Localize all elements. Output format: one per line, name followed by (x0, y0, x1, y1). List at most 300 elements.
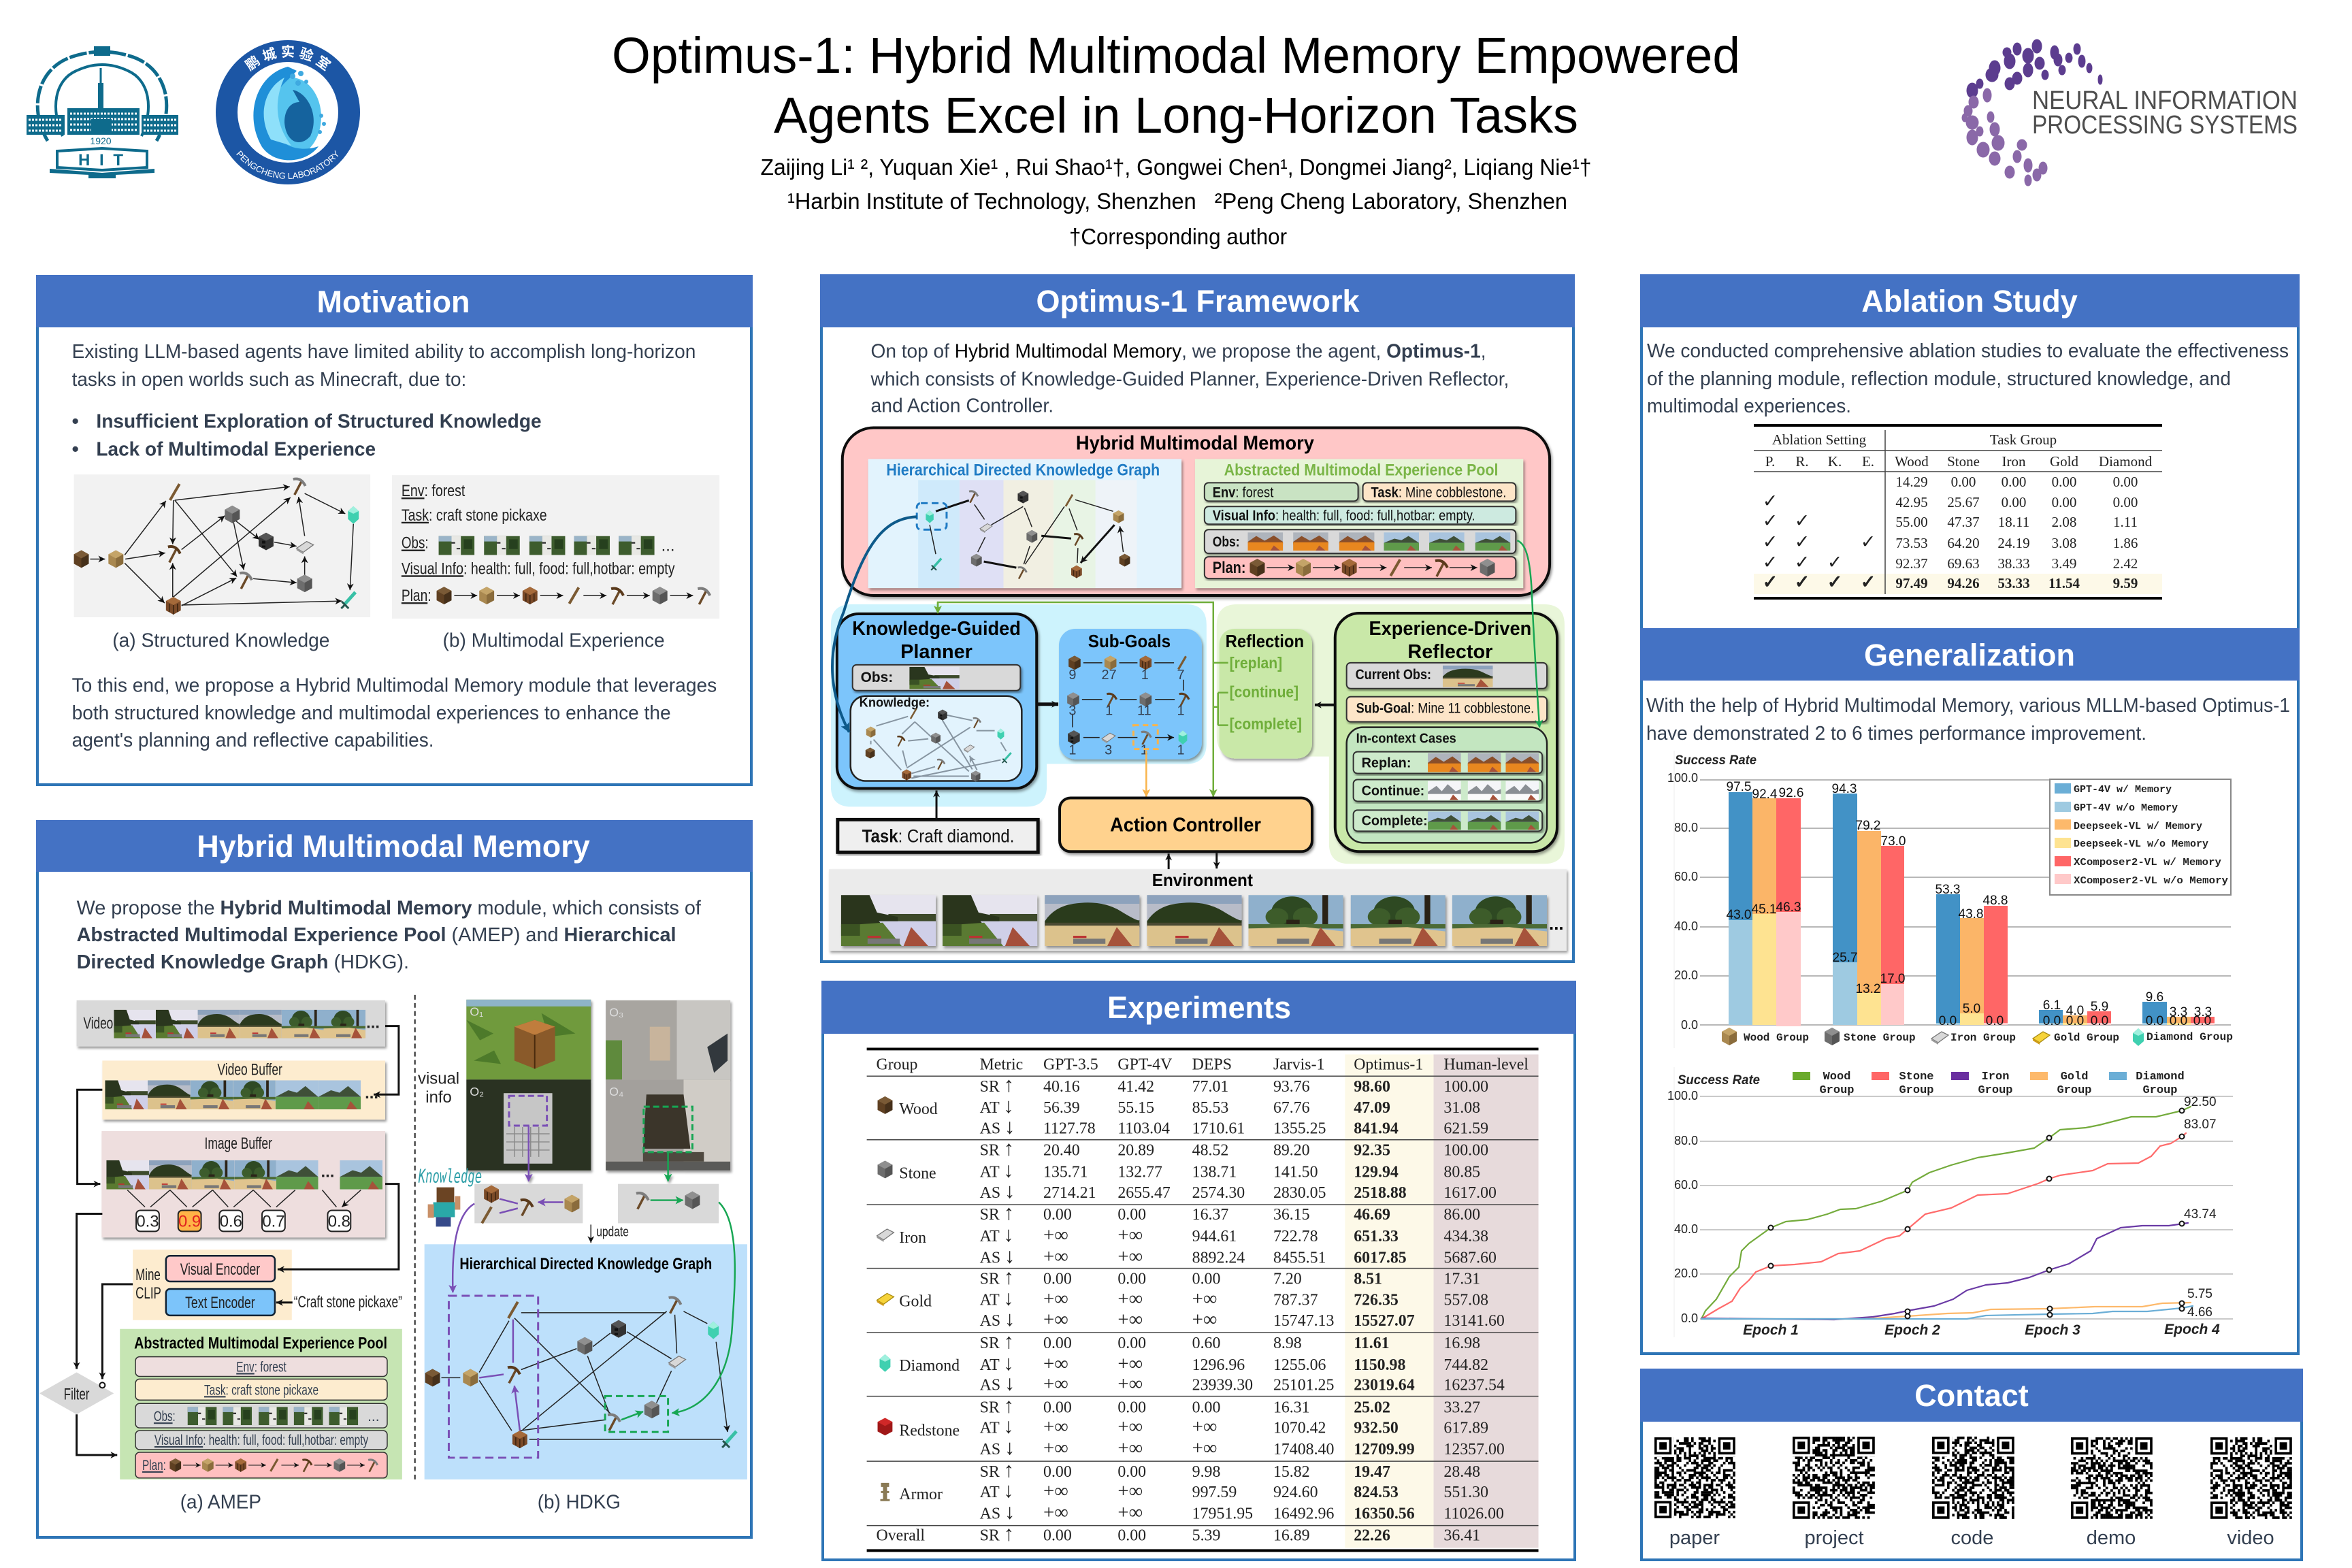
box: Knowledge-Guided Planner: Knowledge-Guided (852, 618, 1021, 640)
results table: 824.53 (1354, 1484, 1399, 1501)
ablation table: ✓ (1763, 491, 1778, 511)
results table: 85.53 (1192, 1099, 1228, 1117)
HMM intro text: Abstracted Multimodal Experience Pool (AMEP) and Hierarchical (77, 924, 676, 946)
figure: multimodal experience (392, 475, 719, 619)
results table: 2655.47 (1117, 1184, 1171, 1202)
line chart: success rate over epochs: 43.74 (2184, 1207, 2217, 1222)
results table: +∞ (1117, 1502, 1143, 1524)
MineCLIP encoders (133, 1250, 402, 1320)
video buffer: Video Buffer (217, 1060, 282, 1079)
arrow: knowledge retrieval curve (832, 517, 917, 732)
box: Action Controller (1060, 798, 1312, 851)
AMEP sub-panel (1195, 459, 1523, 588)
panel: Experiments (821, 981, 1576, 1560)
ablation table: Gold (2050, 453, 2078, 470)
bar chart: success rate by group: 45.1 (1752, 902, 1776, 917)
results table: +∞ (1117, 1288, 1143, 1309)
bar chart legend: GPT-4V w/ Memory (2074, 784, 2172, 796)
bar chart: success rate by group: 100.0 (1667, 771, 1698, 785)
AMEP card: Obs: (154, 1409, 176, 1424)
bar chart legend: GPT-4V w/o Memory (2074, 802, 2178, 814)
results table: 12357.00 (1443, 1441, 1505, 1458)
results table: +∞ (1117, 1480, 1143, 1502)
ablation table: 55.00 (1895, 514, 1928, 530)
motivation bullets: Insufficient Exploration of Structured Knowledge (96, 411, 542, 433)
results table: 1296.96 (1192, 1356, 1245, 1374)
results table: 726.35 (1354, 1291, 1399, 1309)
results table: +∞ (1043, 1502, 1068, 1524)
results table: 0.00 (1043, 1335, 1072, 1352)
results table: AT ↓ (980, 1223, 1014, 1246)
bar chart: success rate by group: 3.3 (2170, 1005, 2187, 1019)
bar chart: success rate by group: 6.1 (2043, 998, 2061, 1013)
figure: multimodal experience: Visual Info: health: full, food: full,hotbar: empty (402, 559, 675, 578)
ablation heading: Ablation Study (1861, 284, 2078, 318)
ablation table: ✓ (1795, 572, 1810, 592)
experiments heading: Experiments (1107, 990, 1291, 1025)
results table: 621.59 (1443, 1120, 1488, 1138)
bar chart: success rate by group: 20.0 (1674, 968, 1698, 982)
QR labels (1669, 1527, 2274, 1549)
ablation table: Diamond (2099, 453, 2153, 470)
box: Sub-Goals: 11 (1137, 704, 1152, 719)
mini graph: table and stick to wooden pickaxe (474, 1184, 583, 1223)
purple update curve (453, 1204, 474, 1292)
results table: 0.00 (1192, 1399, 1220, 1416)
bar chart: success rate by group: 9.6 (2146, 990, 2163, 1004)
results table: AT ↓ (980, 1479, 1014, 1502)
box: Reflection: [replan] (1230, 654, 1282, 672)
bar chart: success rate by group: 97.5 (1727, 780, 1751, 794)
filter diamond: Filter (64, 1385, 90, 1403)
HDKG sub-panel (868, 459, 1181, 588)
results table: Human-level (1443, 1056, 1529, 1073)
line chart: success rate over epochs: Epoch 2 (1884, 1322, 1940, 1338)
results table: 15527.07 (1354, 1312, 1415, 1330)
ablation table: 25.67 (1947, 494, 1980, 510)
figure: multimodal experience: Plan: (402, 587, 431, 605)
results table: 138.71 (1192, 1163, 1237, 1181)
bar chart: success rate by group: 0.0 (2146, 1014, 2163, 1028)
results table: +∞ (1117, 1373, 1143, 1395)
results table: SR ↑ (980, 1201, 1014, 1224)
results table: AS ↓ (980, 1245, 1015, 1268)
results table: 997.59 (1192, 1484, 1237, 1501)
ablation table: 3.49 (2052, 555, 2076, 572)
box: Knowledge-Guided Planner: Planner (900, 641, 973, 663)
box: Environment: Environment (1152, 871, 1253, 890)
ablation table: ✓ (1827, 552, 1842, 572)
results table: +∞ (1192, 1437, 1217, 1459)
image buffer (101, 1131, 385, 1237)
results table: Optimus-1 (1354, 1056, 1423, 1073)
box: Hybrid Multimodal Memory: Hybrid Multimodal Memory (1076, 432, 1314, 454)
line chart: success rate over epochs: 40.0 (1674, 1222, 1698, 1236)
results table: 0.00 (1117, 1526, 1146, 1544)
mini graph: stone pickaxe to stone (618, 1184, 719, 1223)
motivation conclusion text (72, 674, 717, 751)
results table: SR ↑ (980, 1394, 1014, 1417)
box: Sub-Goals: 1 (1068, 743, 1076, 758)
line chart: success rate over epochs: 4.66 (2187, 1305, 2212, 1320)
bar chart: success rate by group: Diamond Group (2146, 1031, 2233, 1043)
QR labels: code (1951, 1527, 1993, 1549)
results table: 77.01 (1192, 1078, 1228, 1096)
bar chart: success rate by group: 60.0 (1674, 870, 1698, 883)
ablation table: Iron (2002, 453, 2026, 470)
QR labels: project (1804, 1527, 1864, 1549)
title (612, 27, 1740, 144)
results table: AS ↓ (980, 1501, 1015, 1524)
logo: HIT: HIT (78, 151, 123, 169)
box: Knowledge-Guided Planner: Obs: (861, 670, 893, 685)
screenshot: crafting table (466, 1000, 591, 1079)
line chart: success rate over epochs: Epoch 3 (2025, 1322, 2080, 1338)
framework intro text: and Action Controller. (871, 395, 1054, 417)
ablation table: 1.86 (2113, 535, 2138, 551)
results table: 23019.64 (1354, 1377, 1415, 1394)
box: Sub-Goals: 27 (1102, 668, 1117, 683)
results table: 98.60 (1354, 1078, 1390, 1096)
diagram: AMEP pipeline (39, 1000, 402, 1480)
ablation table: P. (1765, 453, 1775, 470)
framework intro text: On top of Hybrid Multimodal Memory, we propose the agent, Optimus-1, (871, 341, 1486, 363)
results table: Iron (899, 1229, 926, 1247)
results table: 1355.25 (1273, 1120, 1326, 1138)
AMEP card: Plan: (142, 1458, 166, 1473)
results table: Gold (899, 1292, 932, 1310)
figure: multimodal experience: ... (662, 537, 675, 555)
logo: NeurIPS (1963, 40, 2298, 185)
results table (867, 1049, 1539, 1550)
bar chart: success rate by group: 0.0 (2043, 1014, 2061, 1028)
results table: +∞ (1117, 1224, 1143, 1246)
ablation table: 14.29 (1895, 474, 1928, 490)
HMM intro text: We propose the Hybrid Multimodal Memory module, which consists of (77, 897, 702, 919)
results table: 93.76 (1273, 1078, 1310, 1096)
box: Sub-Goals: 7 (1177, 668, 1185, 683)
results table: +∞ (1192, 1309, 1217, 1330)
results table: 12709.99 (1354, 1441, 1415, 1458)
ablation table: 3.08 (2052, 535, 2076, 551)
generalization text: With the help of Hybrid Multimodal Memory, various MLLM-based Optimus-1 (1646, 695, 2290, 717)
diagram: HDKG construction (418, 1000, 747, 1480)
results table: AS ↓ (980, 1436, 1015, 1459)
knowledge graph card: Hierarchical Directed Knowledge Graph (459, 1255, 712, 1273)
box: Sub-Goals: 3 (1068, 704, 1076, 719)
screenshot: stone (606, 1000, 730, 1079)
ablation table: 0.00 (2113, 494, 2138, 510)
results table: 100.00 (1443, 1078, 1488, 1096)
results table: 5.39 (1192, 1526, 1220, 1544)
results table: +∞ (1043, 1416, 1068, 1437)
HDKG sub-panel: Hierarchical Directed Knowledge Graph (886, 461, 1160, 479)
results table: AS ↓ (980, 1372, 1015, 1395)
results table: 0.00 (1043, 1271, 1072, 1288)
results table: 16.31 (1273, 1399, 1310, 1416)
image buffer: 0.6 (220, 1212, 242, 1230)
results table: +∞ (1043, 1437, 1068, 1459)
results table: 617.89 (1443, 1419, 1488, 1437)
bar chart: success rate by group: 0.0 (2193, 1014, 2211, 1028)
results table: 8455.51 (1273, 1250, 1326, 1267)
ablation table: 53.33 (1997, 575, 2030, 591)
ablation table: ✓ (1795, 510, 1810, 531)
results table: 0.00 (1117, 1399, 1146, 1416)
results table: 11.61 (1354, 1335, 1390, 1352)
line chart legend: Diamond (2136, 1071, 2185, 1083)
bar chart: success rate by group: Iron Group (1950, 1032, 2016, 1044)
results table: 132.77 (1117, 1163, 1162, 1181)
results table: AT ↓ (980, 1352, 1014, 1375)
video strip: Video (84, 1015, 113, 1033)
results table: +∞ (1043, 1288, 1068, 1309)
results table: Diamond (899, 1357, 960, 1375)
results table: +∞ (1117, 1437, 1143, 1459)
ablation table: 42.95 (1895, 494, 1928, 510)
contact heading: Contact (1914, 1378, 2029, 1413)
results table: 16492.96 (1273, 1505, 1334, 1523)
results table: 40.16 (1043, 1078, 1080, 1096)
visual info label: visual (418, 1069, 459, 1088)
reflection feedback lines (938, 602, 1228, 796)
results table: 787.37 (1273, 1291, 1318, 1309)
QR code: project (1790, 1434, 1877, 1521)
QR code: code (1929, 1434, 2016, 1521)
caption HDKG: (b) HDKG (538, 1492, 621, 1514)
results table: 67.76 (1273, 1099, 1310, 1117)
results table: 5687.60 (1443, 1250, 1497, 1267)
results table: AT ↓ (980, 1286, 1014, 1309)
logo: HIT (27, 46, 178, 178)
logo: NeurIPS: PROCESSING SYSTEMS (2032, 111, 2298, 140)
results table: Group (877, 1056, 917, 1073)
results table: 47.09 (1354, 1099, 1390, 1117)
results table: 20.40 (1043, 1142, 1080, 1160)
screenshot: inventory (466, 1079, 591, 1181)
QR code: demo (2068, 1435, 2155, 1521)
results table: 744.82 (1443, 1356, 1488, 1374)
results table: +∞ (1043, 1309, 1068, 1330)
HMM intro text: Directed Knowledge Graph (HDKG). (77, 951, 409, 973)
box: Experience-Driven Reflector (1335, 613, 1557, 851)
visual info label: info (425, 1088, 452, 1107)
box: light blue planner backdrop (831, 604, 1207, 806)
results table: GPT-4V (1117, 1056, 1172, 1073)
results table: 2830.05 (1273, 1184, 1326, 1202)
arrows: action controller and environment (1169, 853, 1217, 869)
line chart legend: Group (1819, 1084, 1855, 1097)
QR labels: demo (2087, 1527, 2136, 1549)
bar chart: success rate by group: 0.0 (1939, 1014, 1957, 1028)
bar chart: success rate by group: 48.8 (1983, 894, 2008, 908)
panel: Contact (1640, 1369, 2303, 1560)
ablation table: 38.33 (1997, 555, 2030, 572)
line chart: success rate over epochs: 92.50 (2184, 1095, 2217, 1109)
ablation table: 24.19 (1997, 535, 2030, 551)
image buffer: 0.3 (136, 1212, 159, 1230)
results table: 48.52 (1192, 1142, 1228, 1160)
ablation table: 64.20 (1947, 535, 1980, 551)
results table: +∞ (1043, 1246, 1068, 1268)
results table: DEPS (1192, 1056, 1232, 1073)
ablation table: 94.26 (1947, 575, 1980, 591)
figure: multimodal experience: Obs: (402, 534, 429, 553)
results table: 13141.60 (1443, 1312, 1505, 1330)
image buffer: 0.7 (262, 1212, 285, 1230)
bar chart: success rate by group: 73.0 (1881, 834, 1906, 849)
video strip (77, 1000, 385, 1047)
box: Task (838, 819, 1038, 852)
ablation table: ✓ (1795, 532, 1810, 552)
results table: +∞ (1043, 1373, 1068, 1395)
results table: 434.38 (1443, 1228, 1488, 1245)
box: Environment: ... (1549, 915, 1564, 934)
bar chart: success rate by group: Stone Group (1844, 1032, 1916, 1044)
Knowledge label: Knowledge (418, 1165, 482, 1188)
ablation table: Wood (1895, 453, 1929, 470)
line chart legend: Gold (2061, 1071, 2088, 1083)
generalization heading: Generalization (1864, 638, 2075, 672)
bar chart: success rate by group: 25.7 (1833, 951, 1857, 965)
bar chart legend: Deepseek-VL w/o Memory (2074, 838, 2208, 850)
box: Reflection: [complete] (1230, 715, 1302, 733)
ablation table: 0.00 (1951, 474, 1976, 490)
results table: 1103.04 (1117, 1120, 1170, 1138)
AMEP sub-panel: Obs: (1213, 534, 1240, 550)
motivation intro text: tasks in open worlds such as Minecraft, due to: (72, 369, 466, 391)
ablation text: We conducted comprehensive ablation studies to evaluate the effectiveness (1647, 340, 2289, 362)
results table: Jarvis-1 (1273, 1056, 1324, 1073)
QR code: paper (1652, 1435, 1737, 1520)
line chart: success rate over epochs: 60.0 (1674, 1178, 1698, 1192)
arrow: reflector to reflection (1315, 704, 1335, 706)
bar chart: success rate by group: 5.9 (2091, 1000, 2108, 1014)
ablation table: ✓ (1795, 552, 1810, 572)
ablation table: 69.63 (1947, 555, 1980, 572)
results table: 2714.21 (1043, 1184, 1096, 1202)
box: Knowledge-Guided Planner: Knowledge: (860, 696, 930, 710)
bar chart: success rate by group: 0.0 (2066, 1014, 2084, 1028)
line chart: success rate over epochs: Success Rate (1678, 1073, 1760, 1088)
ablation table: ✓ (1763, 552, 1778, 572)
box: Hybrid Multimodal Memory (843, 428, 1550, 595)
figure: structured knowledge graph (74, 474, 370, 617)
screenshot: inventory: O₂ (470, 1085, 484, 1098)
bar chart: success rate by group: 4.0 (2066, 1004, 2084, 1018)
results table: +∞ (1043, 1224, 1068, 1246)
results table: 1127.78 (1043, 1120, 1096, 1138)
green update curve (672, 1203, 735, 1413)
results table: 0.00 (1192, 1271, 1220, 1288)
framework heading: Optimus-1 Framework (1036, 284, 1360, 318)
results table: 20.89 (1117, 1142, 1154, 1160)
line chart legend: Group (1899, 1084, 1934, 1097)
title: Agents Excel in Long-Horizon Tasks (774, 87, 1578, 144)
image buffer: 0.8 (328, 1212, 350, 1230)
line chart legend: Stone (1899, 1071, 1934, 1083)
panel: Optimus-1 Framework (820, 274, 1575, 962)
bar chart legend: XComposer2-VL w/o Memory (2074, 875, 2228, 887)
results table: 89.20 (1273, 1142, 1310, 1160)
video buffer: ... (365, 1084, 378, 1102)
bar chart legend (2050, 779, 2231, 895)
bar chart legend: XComposer2-VL w/ Memory (2074, 857, 2221, 868)
bar chart: success rate by group: Wood Group (1744, 1032, 1809, 1044)
image buffer: ... (321, 1163, 334, 1181)
results table: 33.27 (1443, 1399, 1480, 1416)
HMM heading: Hybrid Multimodal Memory (197, 829, 590, 864)
MineCLIP encoders: Mine (135, 1266, 161, 1284)
knowledge graph card (425, 1244, 747, 1480)
visual info label (418, 1069, 459, 1107)
results table: Wood (899, 1100, 938, 1118)
caption a: (a) Structured Knowledge (112, 630, 329, 652)
box: Sub-Goals: 3 (1105, 743, 1112, 758)
line chart: success rate over epochs: 20.0 (1674, 1267, 1698, 1280)
ablation table: Ablation Setting (1772, 431, 1867, 448)
motivation bullets (72, 411, 542, 460)
HMM intro text (77, 897, 702, 973)
screenshot: hole (606, 1079, 730, 1181)
ablation table: 0.00 (2052, 494, 2076, 510)
title: Optimus-1: Hybrid Multimodal Memory Empowered (612, 27, 1740, 84)
results table: 16237.54 (1443, 1377, 1505, 1394)
box: Experience-Driven Reflector: Replan: (1362, 756, 1411, 771)
results table: +∞ (1192, 1416, 1217, 1437)
ablation text: multimodal experiences. (1647, 395, 1851, 417)
panel: Ablation Study and Generalization (1640, 274, 2300, 1354)
results table: 17408.40 (1273, 1441, 1334, 1458)
ablation table: ✓ (1861, 532, 1876, 552)
results table: 92.35 (1354, 1142, 1390, 1160)
line chart: success rate over epochs: 5.75 (2187, 1287, 2212, 1301)
results table: 80.85 (1443, 1163, 1480, 1181)
MineCLIP encoders: Visual Encoder (180, 1260, 260, 1279)
QR code: video (2208, 1435, 2294, 1521)
arrow: sub-goals to action controller (1145, 751, 1147, 796)
box: Experience-Driven Reflector: Sub-Goal: Mine 11 cobblestone. (1356, 701, 1534, 717)
results table: AS ↓ (980, 1307, 1015, 1330)
AMEP card: Task: craft stone pickaxe (204, 1382, 318, 1398)
AMEP card: Visual Info: health: full, food: full,hotbar: empty (154, 1433, 369, 1448)
bar chart: success rate by group: 40.0 (1674, 919, 1698, 933)
results table: +∞ (1117, 1353, 1143, 1375)
results table: 551.30 (1443, 1484, 1488, 1501)
bar chart: success rate by group: 0.0 (1986, 1014, 2004, 1028)
results table: SR ↑ (980, 1137, 1014, 1160)
ablation table: ✓ (1861, 572, 1876, 592)
box: Reflection: [continue] (1230, 683, 1298, 701)
ablation table: ✓ (1827, 572, 1842, 592)
results table: Metric (980, 1056, 1023, 1073)
results table: SR ↑ (980, 1073, 1014, 1096)
ablation table: ✓ (1763, 510, 1778, 531)
results table: 7.20 (1273, 1271, 1302, 1288)
AMEP sub-panel: Task: Mine cobblestone. (1371, 485, 1506, 500)
motivation bullets: • (72, 438, 79, 460)
ablation table: R. (1795, 453, 1809, 470)
image buffer: Image Buffer (205, 1134, 272, 1153)
bar chart: success rate by group: 0.0 (1681, 1018, 1698, 1032)
ablation table: ✓ (1763, 572, 1778, 592)
results table: AS ↓ (980, 1179, 1015, 1203)
arrow: experience retrieval curve (1517, 540, 1539, 728)
panel: Hybrid Multimodal Memory (36, 820, 753, 1537)
box: Experience-Driven Reflector: Reflector (1407, 641, 1492, 663)
update arrow (591, 1224, 629, 1243)
results table: 8.98 (1273, 1335, 1302, 1352)
